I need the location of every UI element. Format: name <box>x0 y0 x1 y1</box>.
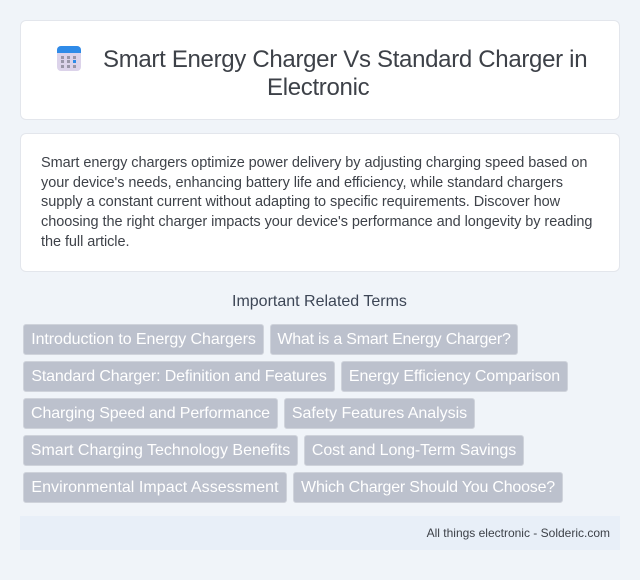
description text <box>41 155 592 250</box>
chip <box>23 398 278 429</box>
chip: Standard Charger: Definition and Features <box>31 368 327 385</box>
chip <box>304 435 524 466</box>
chip <box>341 361 568 392</box>
chip: Smart Charging Technology Benefits <box>31 442 290 459</box>
chip <box>293 472 563 503</box>
chip: Environmental Impact Assessment <box>31 479 279 496</box>
panel: title card <box>20 20 620 120</box>
chip: Cost and Long-Term Savings <box>312 442 516 459</box>
chip <box>270 324 518 355</box>
description text: Smart energy chargers optimize power delivery by adjusting charging speed based on <box>41 155 587 171</box>
chip: Energy Efficiency Comparison <box>349 368 560 385</box>
chips: related terms <box>23 324 568 503</box>
description text: choosing the right charger impacts your device's performance and longevity by reading <box>41 214 592 230</box>
chip <box>23 324 264 355</box>
chip: Safety Features Analysis <box>292 405 467 422</box>
chip <box>284 398 475 429</box>
heading line 2: Electronic <box>267 74 369 101</box>
chip: Charging Speed and Performance <box>31 405 270 422</box>
chip: Introduction to Energy Chargers <box>31 331 256 348</box>
footer bar <box>20 516 620 550</box>
chip: What is a Smart Energy Charger? <box>277 331 511 348</box>
panel: description card <box>20 133 620 272</box>
description text: supply a constant current without adapting to specific requirements. Discover how <box>41 194 560 210</box>
chip <box>23 472 287 503</box>
chip <box>23 435 298 466</box>
chip: Which Charger Should You Choose? <box>301 479 555 496</box>
section heading: related terms: Important Related Terms <box>232 293 407 310</box>
footer text: All things electronic - Solderic.com <box>427 526 610 540</box>
icon: calendar <box>57 46 81 71</box>
heading line 1: Smart Energy Charger Vs Standard Charger in <box>103 46 587 73</box>
description text: your device's needs, enhancing battery life and efficiency, while standard chargers <box>41 175 563 191</box>
chip <box>23 361 335 392</box>
description text: the full article. <box>41 234 129 250</box>
